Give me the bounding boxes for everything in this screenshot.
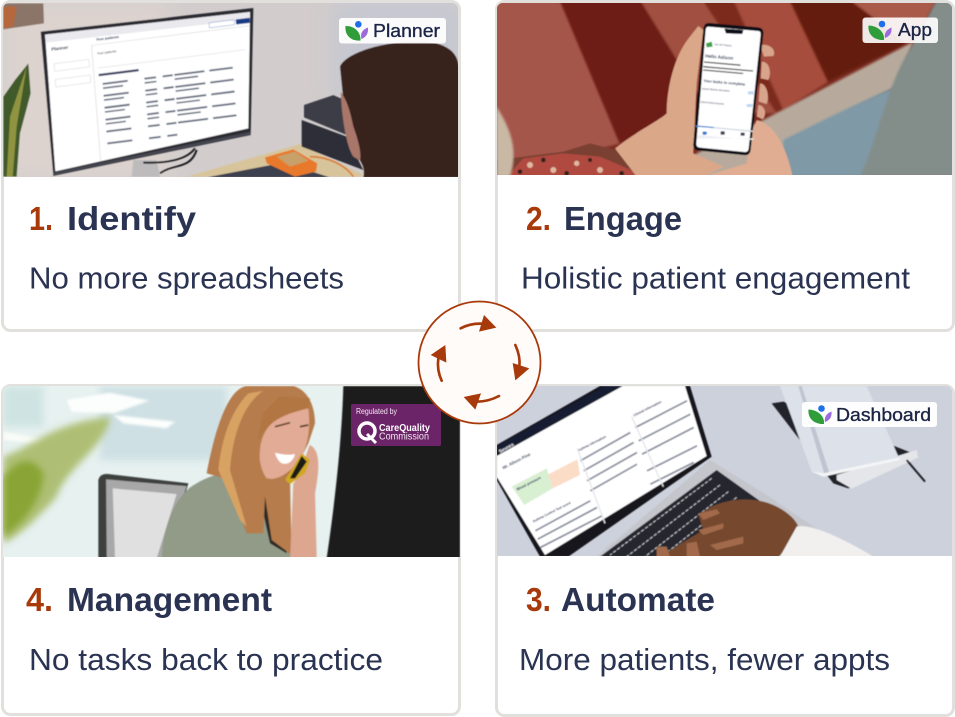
badge: Dashboard xyxy=(802,402,937,427)
logo: Regulated by Care Quality Commission: Regulated by xyxy=(356,407,397,416)
panel: 3. Automate xyxy=(496,386,954,716)
arrow: right xyxy=(513,345,529,380)
text: Holistic patient engagement: Holistic patient engagement xyxy=(521,262,911,296)
badge: App xyxy=(862,18,938,43)
photo: hands typing on a laptop showing the Dashboard: Asthma information xyxy=(577,435,607,453)
photo: hands holding phone with App: Your GP Practice xyxy=(714,43,733,48)
heading: 4. Management: Management xyxy=(67,581,272,618)
photo: hands holding phone with App xyxy=(490,0,955,177)
photo: hands holding phone with App: Submit blood pressure xyxy=(701,101,725,106)
text: More patients, fewer appts: More patients, fewer appts xyxy=(519,643,890,677)
photo: smiling woman on the phone with CQC badge xyxy=(3,386,460,558)
photo: hands holding phone with App: Hello Adison xyxy=(705,53,734,61)
heading: 1. Identify: Identify xyxy=(67,200,197,237)
photo: hands holding phone with App: Submit lifestyle information xyxy=(702,87,731,93)
logo: Regulated by Care Quality Commission: Commission xyxy=(379,432,429,442)
heading: 3. Automate: 3. xyxy=(526,581,551,618)
arrow: bottom xyxy=(464,393,499,410)
photo: woman using Planner on a monitor xyxy=(0,0,467,180)
photo: hands typing on a laptop showing the Dashboard: Mr. Alison Pine xyxy=(502,451,532,470)
photo: hands typing on a laptop showing the Dashboard: Blood pressure xyxy=(516,476,542,492)
panel: 4. Management xyxy=(2,386,460,714)
panel: 2. Engage xyxy=(490,0,955,330)
panel: 1. Identify xyxy=(0,0,467,330)
heading: 2. Engage: Engage xyxy=(564,200,682,237)
logo: Regulated by Care Quality Commission: CareQuality xyxy=(379,422,430,434)
photo: woman using Planner on a monitor: Your patients xyxy=(97,49,117,56)
icon: circular cycle arrows xyxy=(418,302,540,424)
arrow: top xyxy=(461,315,496,332)
logo: Regulated by Care Quality Commission xyxy=(351,404,441,446)
photo: hands typing on a laptop showing the Dashboard xyxy=(497,386,952,558)
heading: 1. Identify: 1. xyxy=(29,200,53,237)
photo: woman using Planner on a monitor: Your patients xyxy=(96,35,119,42)
heading: 4. Management: 4. xyxy=(26,581,53,618)
photo: hands holding phone with App: Your tasks to complete xyxy=(703,79,745,87)
badge: App: App xyxy=(898,19,932,40)
heading: 1. Identify xyxy=(29,200,197,237)
badge: Planner: Planner xyxy=(373,20,440,41)
heading: 2. Engage: 2. xyxy=(526,200,551,237)
arrow: left xyxy=(431,345,446,381)
text: No tasks back to practice: No tasks back to practice xyxy=(29,643,383,677)
badge: Dashboard: Dashboard xyxy=(836,404,931,425)
photo: hands typing on a laptop showing the Dashboard: Clinical information xyxy=(633,400,662,418)
photo: hands typing on a laptop showing the Dashboard: Sevres xyxy=(498,442,515,455)
photo: hands typing on a laptop showing the Dashboard: Asthma Control Test score xyxy=(532,501,572,524)
badge: Planner xyxy=(339,18,446,44)
photo: woman using Planner on a monitor: Planner xyxy=(51,45,69,52)
heading: 3. Automate: Automate xyxy=(561,581,715,618)
text: No more spreadsheets: No more spreadsheets xyxy=(29,262,344,296)
